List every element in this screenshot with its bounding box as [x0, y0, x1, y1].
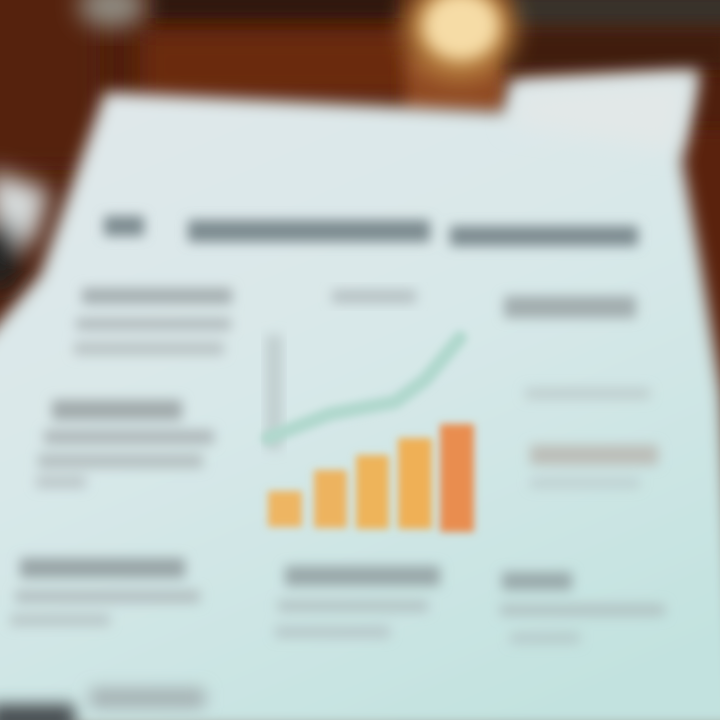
- text block: top right: [504, 296, 658, 488]
- text block: top left: [74, 288, 232, 355]
- left side object: [0, 170, 50, 291]
- heading: [104, 216, 638, 246]
- paper tab highlight: [510, 80, 690, 150]
- text block: bottom center: [275, 566, 440, 638]
- footer text and dark corner: [0, 688, 205, 720]
- text block: top center heading: [332, 290, 416, 303]
- bar chart: [268, 424, 474, 532]
- blurred white object top left: [78, 0, 146, 28]
- chart axis: [266, 335, 282, 450]
- chart: growth line and bars: [266, 335, 474, 532]
- text block: middle left: [36, 400, 214, 488]
- text block: bottom left: [10, 558, 200, 626]
- lamp highlight: [404, 0, 516, 80]
- growth line: [268, 338, 460, 438]
- text block: bottom right: [500, 572, 665, 644]
- dark upper background band: [150, 0, 720, 26]
